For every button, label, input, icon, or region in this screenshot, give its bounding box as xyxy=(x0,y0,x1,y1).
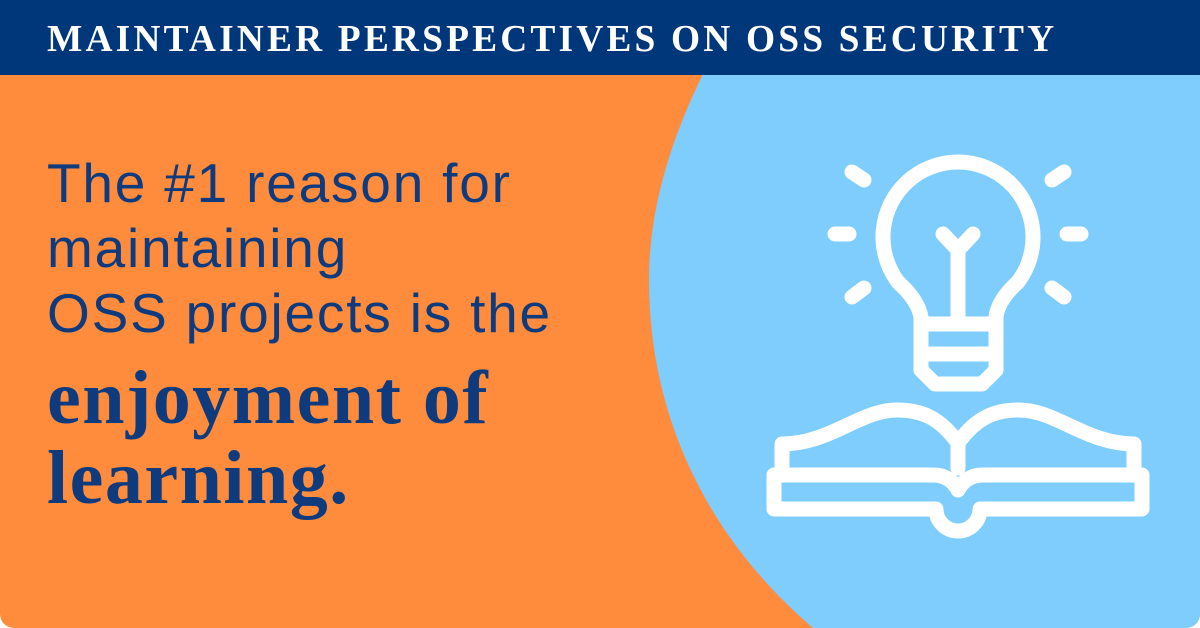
headline text: maintaining xyxy=(47,217,348,279)
headline text: learning. xyxy=(47,436,350,520)
title: MAINTAINER PERSPECTIVES ON OSS SECURITY xyxy=(47,18,1057,60)
header bar xyxy=(0,0,1200,75)
icon: light rays xyxy=(835,172,1081,297)
icon: open book xyxy=(774,410,1142,531)
icon: lightbulb xyxy=(883,162,1033,384)
headline text: enjoyment of xyxy=(47,356,489,440)
headline text: The #1 reason for xyxy=(47,152,512,214)
headline text: OSS projects is the xyxy=(47,282,552,344)
headline text xyxy=(47,152,552,520)
